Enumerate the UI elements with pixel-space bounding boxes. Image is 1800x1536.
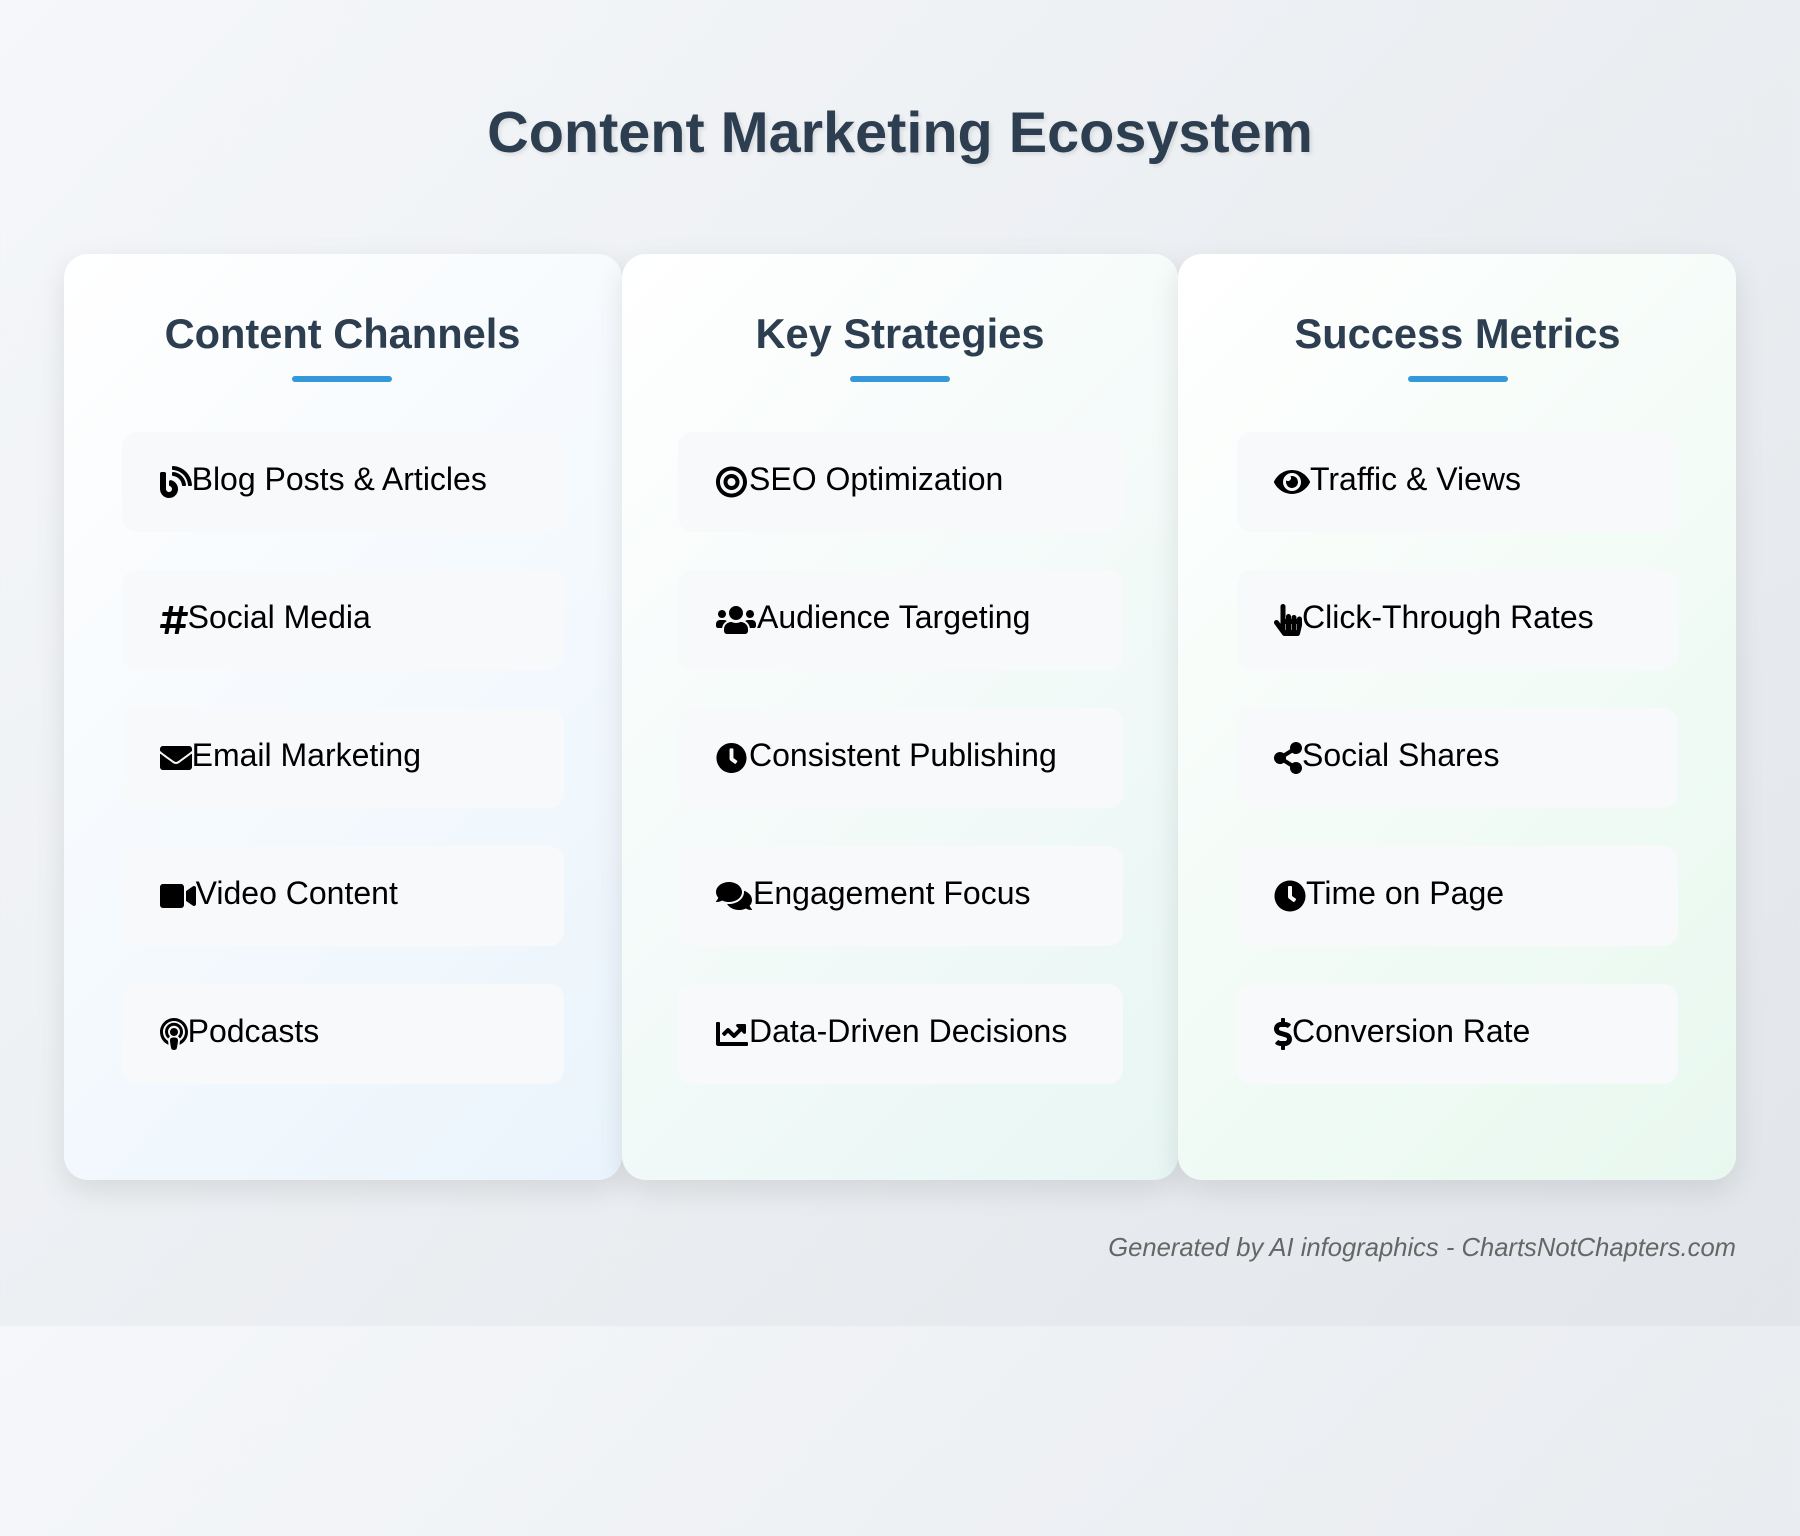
item: blog posts bbox=[122, 432, 564, 532]
item: social shares: Social Shares bbox=[1302, 737, 1499, 773]
item: seo optimization bbox=[678, 432, 1123, 532]
item: data-driven decisions: Data-Driven Decisions bbox=[749, 1013, 1067, 1049]
item: seo optimization: SEO Optimization bbox=[749, 461, 1003, 497]
item: data-driven decisions bbox=[678, 984, 1123, 1084]
footer credit: Generated by AI infographics - ChartsNotChapters.com bbox=[1108, 1234, 1736, 1262]
item: click-through rates: Click-Through Rates bbox=[1302, 599, 1594, 635]
item: video content: Video Content bbox=[196, 875, 398, 911]
item: time on page: Time on Page bbox=[1306, 875, 1504, 911]
item: social media bbox=[122, 570, 564, 670]
panel: success metrics bbox=[1178, 254, 1736, 1180]
item: click-through rates bbox=[1237, 570, 1678, 670]
item: time on page bbox=[1237, 846, 1678, 946]
item: engagement focus: Engagement Focus bbox=[753, 875, 1030, 911]
heading: success metrics: Success Metrics bbox=[1294, 310, 1620, 357]
panel: key strategies bbox=[622, 254, 1178, 1180]
item: podcasts bbox=[122, 984, 564, 1084]
heading: content channels: Content Channels bbox=[165, 310, 520, 357]
item: social shares bbox=[1237, 708, 1678, 808]
item: traffic and views: Traffic & Views bbox=[1310, 461, 1521, 497]
item: traffic and views bbox=[1237, 432, 1678, 532]
item: email marketing: Email Marketing bbox=[192, 737, 421, 773]
item: conversion rate bbox=[1237, 984, 1678, 1084]
item: social media: Social Media bbox=[188, 599, 371, 635]
item: video content bbox=[122, 846, 564, 946]
item: blog posts: Blog Posts & Articles bbox=[192, 461, 487, 497]
panel: content channels bbox=[64, 254, 622, 1180]
item: consistent publishing: Consistent Publishing bbox=[749, 737, 1057, 773]
item: engagement focus bbox=[678, 846, 1123, 946]
item: podcasts: Podcasts bbox=[188, 1013, 319, 1049]
item: audience targeting bbox=[678, 570, 1123, 670]
item: email marketing bbox=[122, 708, 564, 808]
title: Content Marketing Ecosystem bbox=[487, 101, 1313, 165]
item: audience targeting: Audience Targeting bbox=[757, 599, 1030, 635]
item: consistent publishing bbox=[678, 708, 1123, 808]
item: conversion rate: Conversion Rate bbox=[1292, 1013, 1530, 1049]
heading: key strategies: Key Strategies bbox=[756, 310, 1044, 357]
